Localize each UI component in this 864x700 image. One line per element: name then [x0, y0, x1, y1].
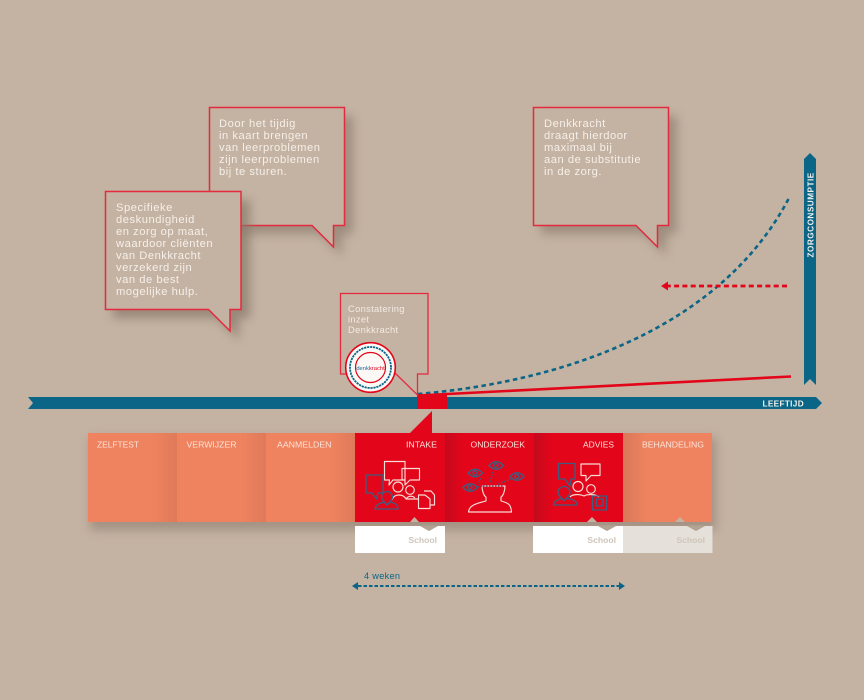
horizontal axis: leeftijd: [28, 397, 822, 409]
callout: substitutie in de zorg: [534, 108, 677, 256]
line: solid red care consumption: [418, 376, 791, 396]
curve: dashed blue care consumption: [418, 198, 789, 394]
callout: specifieke deskundigheid: Specifieke: [116, 202, 173, 214]
callout: tijdig in kaart brengen: in kaart brengen: [219, 130, 308, 142]
process step: onderzoek: ONDERZOEK: [470, 440, 525, 450]
process step: behandeling: [623, 433, 712, 522]
callout: substitutie in de zorg: in de zorg.: [544, 166, 602, 178]
icon: advice conversation: [554, 464, 606, 510]
callout: tijdig in kaart brengen: [210, 108, 353, 256]
process step: behandeling: BEHANDELING: [642, 440, 704, 450]
school box: advies: [533, 517, 623, 553]
callout: specifieke deskundigheid: [106, 192, 250, 340]
school box: intake: [355, 517, 445, 553]
callout: constatering inzet denkkracht: Constatering: [348, 303, 405, 314]
icon: head with eyes: [463, 462, 524, 512]
callout: specifieke deskundigheid: waardoor cliënten: [115, 238, 213, 250]
callout: substitutie in de zorg: maximaal bij: [544, 142, 612, 154]
process step: advies: ADVIES: [583, 440, 614, 450]
marker: red block on axis: [417, 395, 447, 409]
callout: specifieke deskundigheid: verzekerd zijn: [116, 262, 192, 274]
callout: constatering inzet denkkracht: Denkkracht: [348, 324, 399, 335]
school box: behandeling: School: [676, 535, 705, 545]
process cards shadow: [90, 438, 716, 530]
process step: verwijzer: VERWIJZER: [186, 440, 236, 450]
callout: specifieke deskundigheid: van de best: [116, 274, 180, 286]
icon: intake conversation: [366, 462, 434, 509]
callout: specifieke deskundigheid: mogelijke hulp.: [116, 286, 198, 298]
process step: verwijzer: [177, 433, 266, 522]
callout: substitutie in de zorg: draagt hierdoor: [544, 130, 628, 142]
badge: denkkracht logo: [346, 343, 395, 392]
callout: tijdig in kaart brengen: zijn leerproblemen: [219, 154, 320, 166]
callout: specifieke deskundigheid: en zorg op maat,: [116, 226, 208, 238]
process step: zelftest: [88, 433, 177, 522]
timespan arrow: 4 weken: 4 weken: [364, 571, 400, 581]
process step: intake: [355, 433, 445, 522]
badge: denkkracht logo: denkkracht: [356, 366, 385, 372]
process step: intake: INTAKE: [406, 440, 437, 450]
horizontal axis: leeftijd: LEEFTIJD: [762, 400, 804, 408]
pointer: axis to intake: [410, 411, 432, 433]
timespan arrow: 4 weken: [352, 571, 625, 590]
callout: tijdig in kaart brengen: van leerproblemen: [219, 142, 321, 154]
callout: tijdig in kaart brengen: Door het tijdig: [219, 118, 296, 130]
school box: advies: School: [587, 535, 616, 545]
callout: constatering inzet denkkracht: [340, 294, 428, 395]
callout: constatering inzet denkkracht: inzet: [348, 314, 369, 324]
school box: intake: School: [408, 535, 437, 545]
process step: zelftest: ZELFTEST: [97, 440, 140, 450]
vertical axis: zorgconsumptie: [804, 153, 816, 385]
callout: specifieke deskundigheid: deskundigheid: [116, 214, 195, 226]
callout: substitutie in de zorg: aan de substitutie: [544, 154, 641, 166]
process step: onderzoek: [445, 433, 534, 522]
vertical axis: zorgconsumptie: ZORGCONSUMPTIE: [806, 172, 816, 258]
callout: substitutie in de zorg: Denkkracht: [544, 118, 606, 130]
process step: aanmelden: AANMELDEN: [277, 440, 332, 450]
callout: specifieke deskundigheid: van Denkkracht: [116, 250, 201, 262]
callout: tijdig in kaart brengen: bij te sturen.: [219, 166, 287, 178]
process step: aanmelden: [266, 433, 355, 522]
process step: advies: [534, 433, 623, 522]
arrow: red dashed reduction: [661, 282, 787, 290]
school box: behandeling: [623, 517, 712, 553]
